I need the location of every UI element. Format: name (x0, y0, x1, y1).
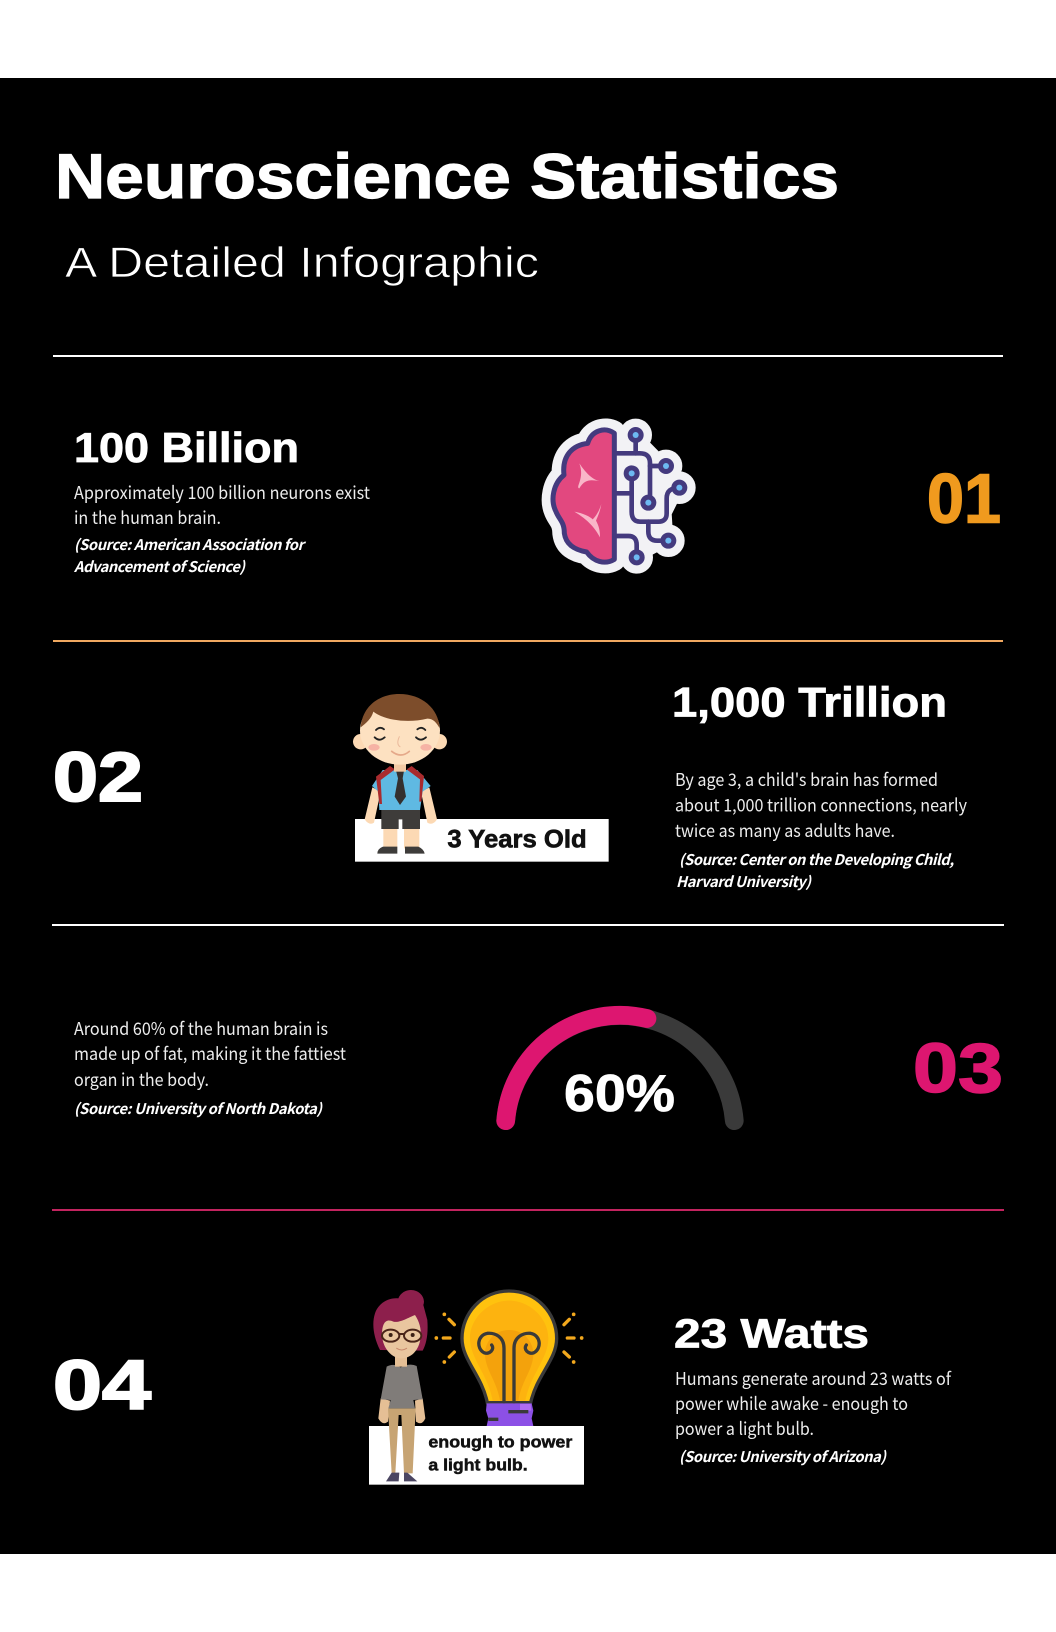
fat description: Around 60% of the human brain is (74, 1016, 328, 1041)
neurons source: (Source: American Association for (74, 534, 307, 555)
connections description: By age 3, a child's brain has formed (675, 767, 938, 792)
number 03: 03 (913, 1029, 1003, 1107)
title: Neuroscience Statistics (55, 142, 839, 212)
backpack straps (376, 766, 424, 804)
connections source: (Source: Center on the Developing Child, (679, 849, 954, 870)
fat description: made up of fat, making it the fattiest (74, 1041, 346, 1066)
subtitle: A Detailed Infographic (65, 239, 539, 287)
neurons description: in the human brain. (74, 505, 221, 530)
watts description: Humans generate around 23 watts of (675, 1366, 952, 1391)
number 01: 01 (927, 460, 1001, 538)
panel: 1,000 trillion connections (53, 678, 967, 892)
illustration: boy with 3 Years Old label (353, 694, 609, 862)
connections description: twice as many as adults have. (675, 818, 895, 843)
panel: 60 percent fat (74, 1015, 1003, 1123)
fat description: organ in the body. (74, 1067, 209, 1092)
illustration: woman (373, 1290, 428, 1481)
label background: enough to power (369, 1426, 584, 1485)
gauge chart: 60% (506, 1015, 734, 1123)
watts description (675, 1366, 952, 1441)
label text: enough to power (428, 1433, 573, 1452)
neurons description (74, 480, 370, 530)
label text: a light bulb. (428, 1456, 528, 1475)
panel: 100 billion neurons (73, 424, 1001, 577)
neurons source: Advancement of Science) (73, 556, 246, 577)
label text (428, 1433, 573, 1475)
stat heading: 1,000 Trillion: 1,000 Trillion (672, 678, 947, 726)
watts source: (Source: University of Arizona) (679, 1446, 887, 1467)
connections source (676, 849, 954, 892)
label background: 3 Years Old (355, 819, 609, 862)
watts description: power a light bulb. (675, 1416, 814, 1441)
fat description (74, 1016, 346, 1092)
watts description: power while awake - enough to (675, 1391, 908, 1416)
icon: brain with circuits (553, 424, 691, 569)
stat heading: 100 Billion: 100 Billion (74, 424, 299, 471)
stat heading: 23 Watts: 23 Watts (674, 1310, 869, 1356)
fat source: (Source: University of North Dakota) (74, 1098, 323, 1119)
gauge value: 60% (564, 1065, 675, 1123)
neurons source (73, 534, 307, 577)
icon: light bulb (436, 1291, 582, 1426)
illustration: woman and light bulb with label (369, 1290, 584, 1485)
connections source: Harvard University) (676, 871, 812, 892)
connections description: about 1,000 trillion connections, nearly (675, 792, 967, 818)
connections description (675, 767, 967, 843)
neurons description: Approximately 100 billion neurons exist (74, 480, 370, 505)
number 02: 02 (53, 738, 143, 816)
label text: 3 Years Old (447, 826, 587, 854)
panel: 23 watts (53, 1290, 952, 1485)
number 04: 04 (53, 1346, 151, 1424)
